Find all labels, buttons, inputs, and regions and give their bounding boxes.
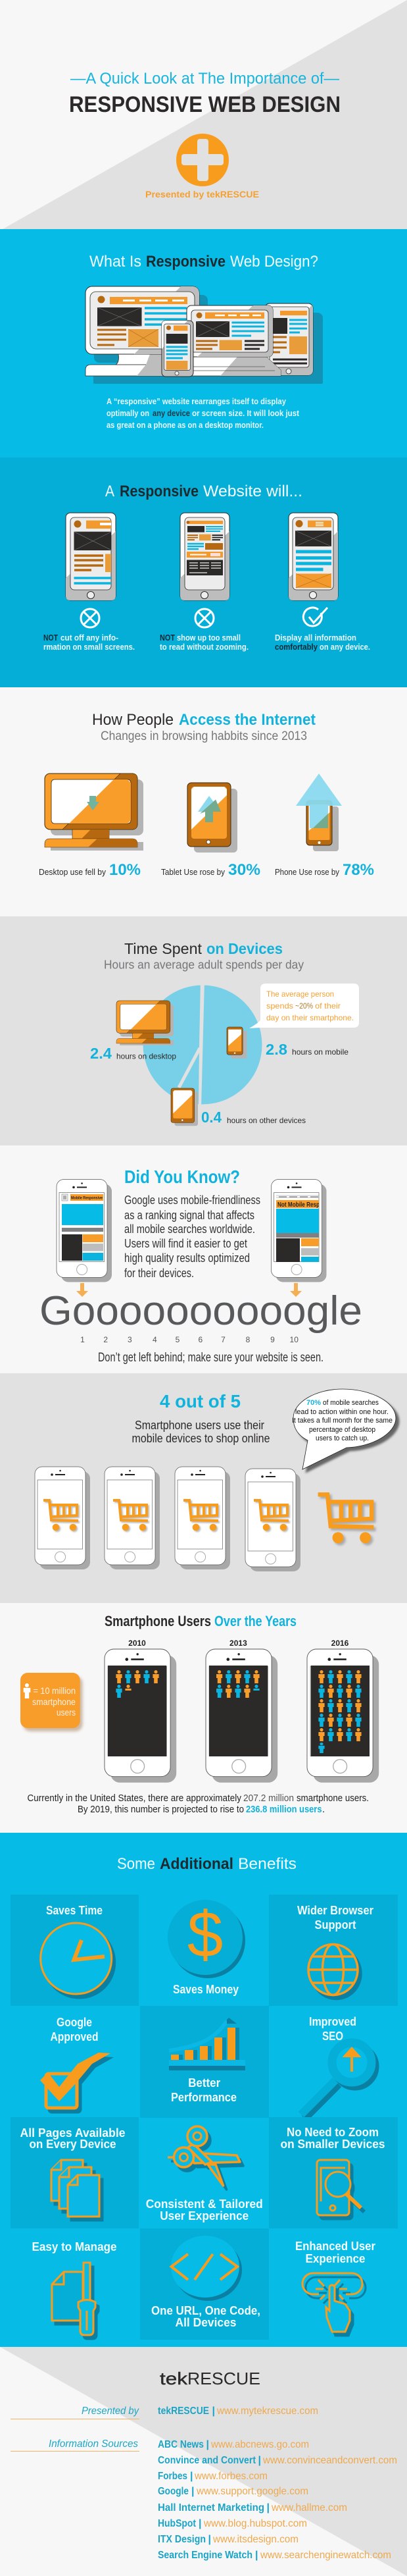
heading	[92, 711, 316, 729]
logo wordmark: tek	[160, 2369, 188, 2388]
panel: additional benefits	[0, 1833, 407, 2347]
heading	[117, 1855, 297, 1873]
callout: speech bubble: users to catch up.	[316, 1434, 369, 1442]
caption: not cut off: rmation on small screens.	[43, 643, 135, 652]
stat: desktop: Desktop use fell by	[39, 867, 106, 877]
phone: not mobile responsive: Not Mobile Responsive	[277, 1201, 337, 1209]
phone: 2016	[307, 1639, 379, 1783]
heading: Web Design?	[230, 253, 318, 271]
phone with cart 2	[105, 1467, 160, 1569]
caption: not too small: show up too small	[177, 633, 241, 643]
sources list: ITX Design	[158, 2534, 206, 2545]
sources list: |	[255, 2550, 258, 2561]
stat: 2.4 desktop	[90, 1045, 176, 1062]
stat: 0.4 other: 0.4	[201, 1109, 222, 1126]
sources list: www.hallme.com	[271, 2502, 347, 2513]
credit: presenter: |	[212, 2405, 215, 2417]
heading: Benefits	[238, 1855, 297, 1873]
stat: desktop: 10%	[109, 861, 141, 879]
stat: phone: Phone Use rose by	[275, 867, 339, 877]
heading	[124, 940, 283, 957]
benefit: improved seo: SEO	[322, 2030, 343, 2043]
benefit: wider browser support: Support	[314, 1918, 356, 1932]
panel: time spent on devices	[0, 916, 407, 1145]
phone with cart 3	[175, 1467, 230, 1569]
sources list: |	[191, 2486, 194, 2497]
caption: not cut off: NOT	[43, 633, 58, 643]
caption: not cut off: cut off any info-	[60, 633, 118, 643]
sources list: Google	[158, 2486, 189, 2497]
benefit: improved seo: Improved	[309, 2015, 356, 2028]
description text: as great on a phone as on a desktop monitor.	[107, 421, 264, 430]
callout: speech bubble: 70%	[306, 1399, 321, 1407]
laptop	[181, 305, 281, 376]
logo wordmark: RESCUE	[187, 2369, 260, 2388]
icon: tablet	[171, 1088, 198, 1126]
page numbers: 7	[221, 1335, 226, 1344]
page numbers: 10	[290, 1335, 299, 1344]
benefit: enhanced user experience: Experience	[305, 2252, 366, 2265]
heading	[105, 1613, 297, 1629]
phone: 2010: 2010	[128, 1639, 146, 1648]
stat: tablet	[161, 861, 260, 879]
icon: phone	[296, 774, 342, 851]
panel: footer	[0, 2347, 407, 2576]
stat: 0.4 other: hours on other devices	[227, 1116, 306, 1125]
text block: .	[322, 1804, 325, 1815]
benefit: easy to manage	[32, 2240, 117, 2335]
heading	[105, 483, 302, 500]
phone with cart 4	[245, 1469, 300, 1571]
caption: not cut off	[43, 633, 135, 652]
benefit: better performance: Better	[188, 2076, 220, 2090]
sources list: www.forbes.com	[194, 2471, 268, 2482]
title kicker: —A Quick Look at The Importance of—	[70, 70, 339, 88]
caption: display all: comfortably	[275, 643, 318, 652]
phone: mobile responsive	[57, 1180, 112, 1282]
sources list: www.abcnews.go.com	[210, 2439, 309, 2450]
credit: presenter	[158, 2405, 318, 2417]
phone: not mobile responsive	[271, 1179, 326, 1282]
page numbers: 3	[128, 1335, 132, 1344]
text block: Google uses mobile-friendliness	[124, 1194, 260, 1207]
panel: how people access the internet	[0, 687, 407, 916]
sources list: |	[258, 2455, 261, 2466]
stat: 2.4 desktop: hours on desktop	[116, 1052, 176, 1061]
benefit: one url: All Devices	[175, 2316, 237, 2329]
sources list	[158, 2439, 397, 2561]
heading: A	[105, 483, 114, 500]
stat heading: 4 out of 5	[160, 1391, 241, 1411]
heading: How People	[92, 711, 174, 729]
sources list: Search Engine Watch	[158, 2550, 252, 2561]
stat: desktop	[39, 861, 141, 879]
stat: 0.4 other	[201, 1109, 306, 1126]
heading: Over the Years	[214, 1613, 297, 1629]
benefit: improved seo	[301, 2015, 371, 2115]
sources list: Hall Internet Marketing	[158, 2502, 264, 2513]
benefit: all pages available	[11, 2117, 139, 2228]
benefit: no need to zoom	[269, 2117, 398, 2228]
benefit: consistent and tailored: User Experience	[160, 2209, 249, 2222]
caption: not too small: NOT	[160, 633, 175, 643]
benefit: one url: One URL, One Code,	[151, 2304, 260, 2317]
benefit: google approved: Approved	[50, 2030, 99, 2043]
benefit: one url	[140, 2228, 269, 2340]
benefit: better performance	[140, 2006, 269, 2118]
text block: Currently in the United States, there are approximately	[28, 1793, 241, 1804]
benefit: enhanced user experience: Enhanced User	[295, 2240, 375, 2253]
heading: Time Spent	[124, 940, 203, 957]
phone: too small	[180, 513, 229, 600]
subheading: Hours an average adult spends per day	[104, 959, 304, 972]
page numbers: 1	[80, 1335, 85, 1344]
sources list: |	[206, 2439, 209, 2450]
caption: display all	[275, 633, 370, 652]
callout: The average person	[266, 989, 334, 999]
description text: A “responsive” website rearranges itself to display	[107, 397, 286, 406]
benefit: better performance: Performance	[171, 2091, 237, 2104]
callout: speech bubble: of mobile searches	[323, 1399, 379, 1407]
sources list: www.itsdesign.com	[212, 2534, 299, 2545]
page numbers	[80, 1335, 299, 1344]
label: presented by: Presented by	[82, 2405, 139, 2417]
stat: tablet: Tablet Use rose by	[161, 867, 225, 877]
callout: spends	[266, 1001, 293, 1011]
panel: smartphone users over the years	[0, 1603, 407, 1833]
callout: speech bubble: It takes a full month for the same	[292, 1417, 393, 1425]
benefit: consistent and tailored: Consistent & Tailored	[146, 2197, 263, 2211]
legend: = 10 million	[33, 1685, 76, 1696]
sources list: Convince and Convert	[158, 2455, 256, 2466]
callout: of their	[315, 1001, 341, 1011]
benefit: google approved: Google	[57, 2016, 92, 2029]
heading	[89, 253, 318, 271]
text block	[28, 1793, 369, 1815]
arrow: down	[290, 1283, 302, 1297]
text block	[132, 1419, 270, 1445]
arrow: down	[76, 1283, 88, 1297]
caption: display all: on any device.	[320, 643, 370, 652]
benefit: saves money: Saves Money	[173, 1983, 239, 1996]
text block: for their devices.	[124, 1267, 194, 1280]
monitor	[85, 286, 199, 376]
legend	[20, 1673, 80, 1728]
callout: day on their smartphone.	[266, 1013, 354, 1022]
phone: 2016: 2016	[331, 1639, 349, 1648]
benefit: saves money: $	[187, 1898, 223, 1970]
description text: any device	[153, 409, 190, 418]
stat: 2.8 mobile	[266, 1041, 348, 1058]
credit: presenter: tekRESCUE	[158, 2405, 209, 2417]
wordmark: long google: Goooooooooogle	[39, 1288, 362, 1334]
heading: Some	[117, 1855, 155, 1873]
sources list: |	[199, 2518, 201, 2529]
legend: users	[57, 1707, 76, 1718]
benefit: saves money	[168, 1898, 243, 1996]
stat: phone	[275, 861, 374, 879]
icon: phone	[227, 1027, 247, 1059]
stat: tablet: 30%	[228, 861, 260, 879]
benefit: google approved	[40, 2016, 110, 2108]
heading: Responsive	[146, 253, 226, 271]
text block: 207.2 million	[243, 1793, 294, 1804]
text block: smartphone users.	[297, 1793, 369, 1804]
icon: tablet	[187, 783, 237, 853]
benefit: all pages available: on Every Device	[29, 2138, 116, 2151]
benefit: easy to manage: Easy to Manage	[32, 2240, 117, 2253]
callout	[249, 984, 359, 1028]
sources list: www.convinceandconvert.com	[262, 2455, 397, 2466]
pie chart	[143, 981, 262, 1107]
heading: Website will...	[203, 483, 302, 500]
panel: what is responsive web design	[0, 229, 407, 458]
panel: 4 out of 5	[0, 1373, 407, 1603]
panel: a responsive website will	[0, 458, 407, 687]
icon: desktop	[45, 774, 143, 851]
text block: Users will find it easier to get	[124, 1237, 247, 1250]
sources list: Forbes	[158, 2471, 187, 2482]
panel: did you know	[41, 1170, 360, 1364]
heading: Additional	[160, 1855, 233, 1873]
page numbers: 2	[103, 1335, 108, 1344]
page numbers: 4	[153, 1335, 157, 1344]
benefit: wider browser support	[269, 1895, 398, 2006]
benefit: saves time	[11, 1895, 139, 2006]
stat: 2.4 desktop: 2.4	[90, 1045, 112, 1062]
phone: cut off content	[66, 513, 116, 600]
legend: smartphone	[32, 1696, 76, 1707]
sources list: HubSpot	[158, 2518, 197, 2529]
sources list: www.support.google.com	[196, 2486, 308, 2497]
heading: on Devices	[206, 940, 283, 957]
heading: Smartphone Users	[105, 1613, 211, 1629]
benefit: wider browser support: Wider Browser	[297, 1904, 373, 1917]
phone	[162, 321, 193, 377]
sources list: |	[190, 2471, 193, 2482]
heading: What Is	[89, 253, 141, 271]
callout: speech bubble: lead to action within one hour.	[295, 1408, 389, 1416]
icon: cross	[81, 609, 99, 627]
description text: or screen size. It will look just	[192, 409, 300, 418]
text block: all mobile searches worldwide.	[124, 1222, 255, 1236]
heading: Responsive	[120, 483, 199, 500]
benefit: all pages available: All Pages Available	[20, 2126, 125, 2140]
sources list: |	[208, 2534, 211, 2545]
benefit: no need to zoom: on Smaller Devices	[280, 2138, 385, 2151]
panel: header	[0, 0, 407, 229]
sources list: www.blog.hubspot.com	[203, 2518, 307, 2529]
subheading: Changes in browsing habbits since 2013	[101, 729, 307, 743]
benefit: saves time: Saves Time	[46, 1904, 103, 1917]
heading: Access the Internet	[179, 711, 316, 729]
icon: orange plus logo	[176, 134, 229, 186]
page numbers: 6	[198, 1335, 203, 1344]
sources list: www.searchenginewatch.com	[260, 2550, 391, 2561]
closing line: Don’t get left behind; make sure your website is seen.	[98, 1351, 323, 1365]
text block: mobile devices to shop online	[132, 1432, 270, 1445]
text block	[124, 1194, 260, 1280]
callout: speech bubble: percentage of desktop	[309, 1426, 375, 1434]
benefit: no need to zoom: No Need to Zoom	[287, 2126, 379, 2139]
benefit: enhanced user experience	[295, 2240, 375, 2332]
phone with cart 1	[35, 1467, 90, 1569]
illustration: responsive devices	[85, 286, 323, 384]
stat: 2.8 mobile: hours on mobile	[292, 1047, 348, 1057]
caption: not too small: to read without zooming.	[160, 643, 249, 652]
icon: check	[303, 608, 327, 626]
icon: large cart	[318, 1494, 373, 1543]
sources list: |	[267, 2502, 270, 2513]
tablet	[265, 303, 313, 375]
text block: By 2019, this number is projected to rise to	[78, 1804, 244, 1815]
presenter line: Presented by tekRESCUE	[145, 189, 259, 199]
description text	[107, 397, 300, 430]
benefit: consistent and tailored	[146, 2126, 263, 2222]
stat: 2.8 mobile: 2.8	[266, 1041, 287, 1058]
credit: presenter: www.mytekrescue.com	[216, 2405, 318, 2417]
icon: desktop	[116, 1001, 174, 1045]
icon: cross	[195, 609, 214, 627]
phone: 2013	[206, 1639, 277, 1783]
description text: optimally on	[107, 409, 149, 418]
text block: high quality results optimized	[124, 1251, 250, 1265]
caption: display all: Display all information	[275, 633, 356, 643]
text block: Smartphone users use their	[135, 1419, 264, 1432]
phone: 2013: 2013	[229, 1639, 247, 1648]
callout: ~20%	[295, 1001, 313, 1011]
callout: speech bubble	[292, 1389, 396, 1469]
stat: phone: 78%	[343, 861, 374, 879]
sources list: ABC News	[158, 2439, 204, 2450]
text block: 236.8 million users	[246, 1804, 322, 1815]
page numbers: 8	[246, 1335, 251, 1344]
page numbers: 9	[270, 1335, 275, 1344]
text block: as a ranking signal that affects	[124, 1209, 254, 1222]
phone: mobile responsive: Mobile Responsive	[71, 1196, 103, 1201]
caption: not too small	[160, 633, 249, 652]
heading: Did You Know?	[124, 1167, 240, 1187]
phone: fits correctly	[289, 513, 338, 600]
label: information sources: Information Sources	[49, 2438, 138, 2450]
title: RESPONSIVE WEB DESIGN	[69, 92, 341, 117]
page numbers: 5	[176, 1335, 180, 1344]
phone: 2010	[105, 1639, 176, 1783]
